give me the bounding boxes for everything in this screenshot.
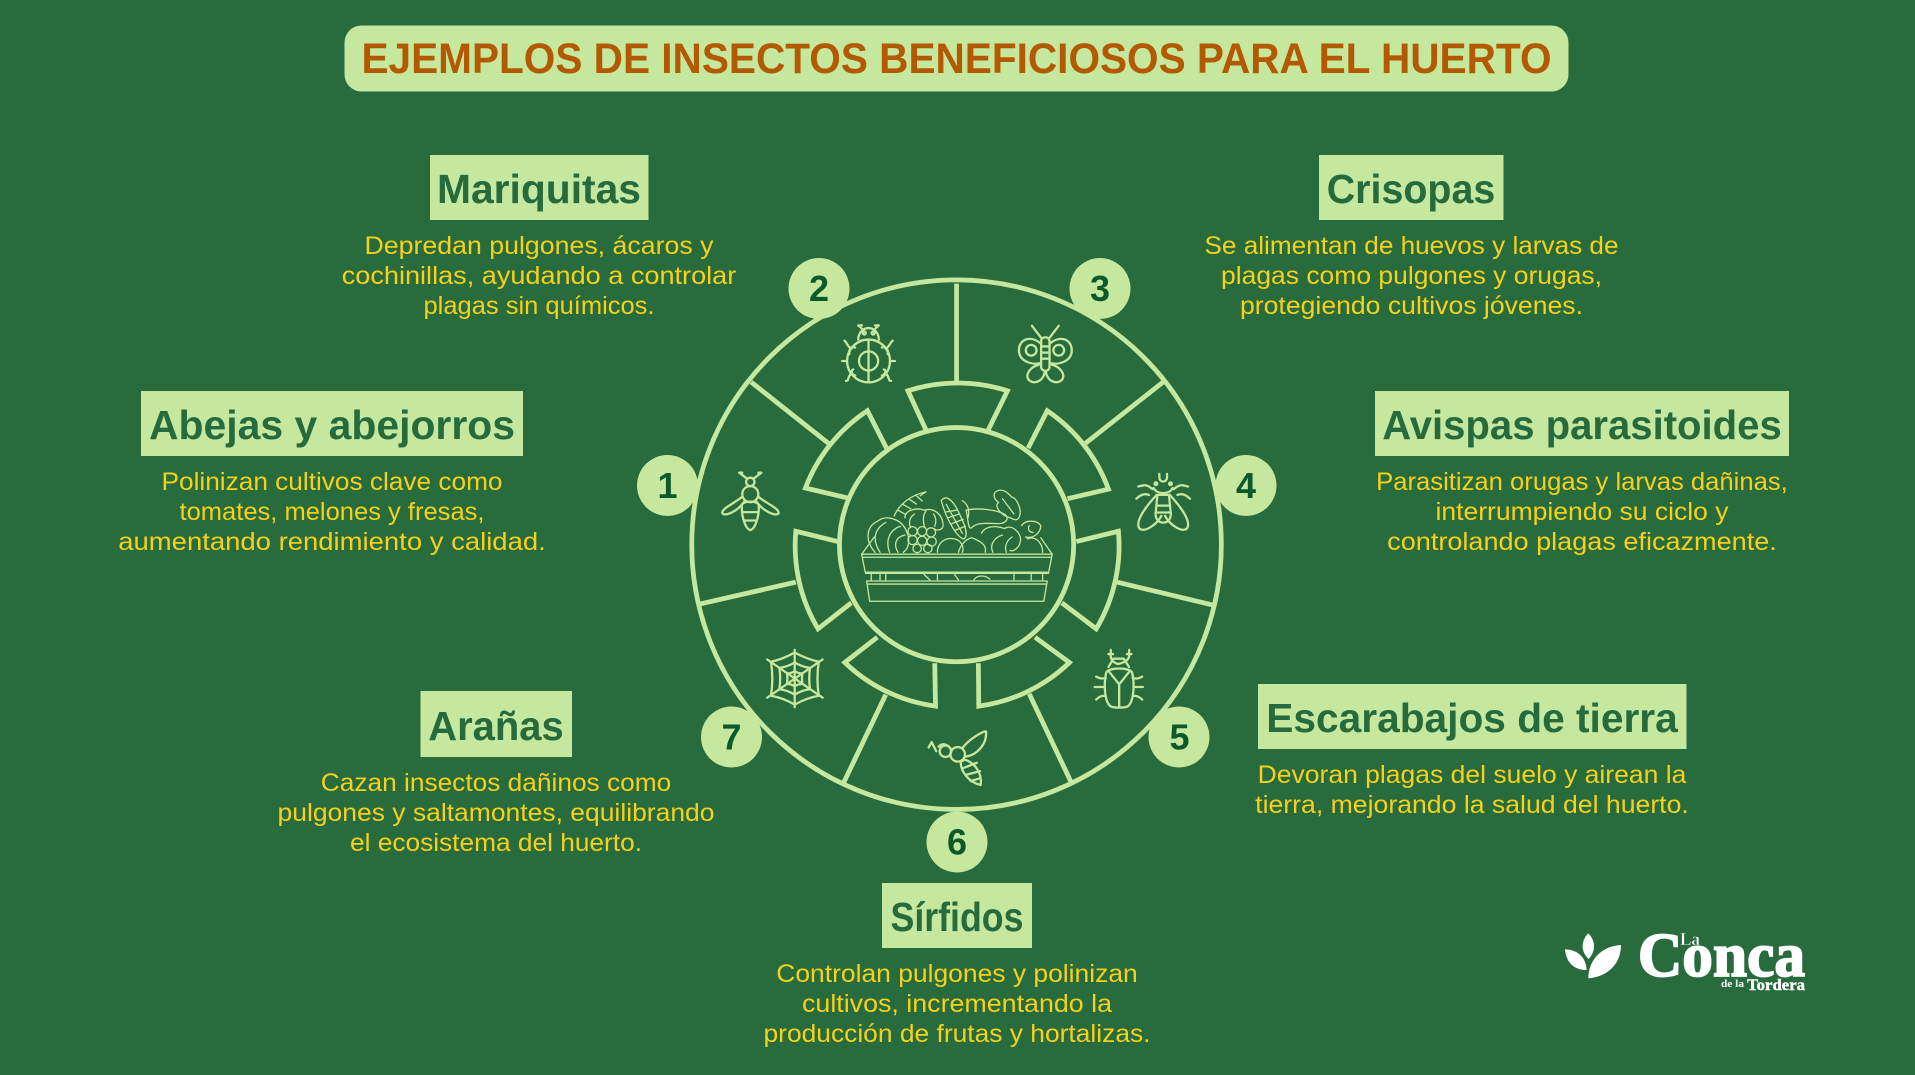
text: Mariquitas description: Depredan pulgones, ácaros y xyxy=(364,232,714,260)
icon: three white leaves xyxy=(1565,933,1621,978)
chart: circular wheel diagram xyxy=(692,280,1221,809)
logo: La Conca de la Tordera: de la xyxy=(1721,979,1744,990)
text: Sírfidos description: Controlan pulgones y polinizan xyxy=(776,960,1138,988)
badge: number 6 xyxy=(926,812,988,872)
badge: number 5: 5 xyxy=(1169,716,1190,758)
text: Arañas description: Cazan insectos dañinos como xyxy=(321,769,671,797)
badge: number 5 xyxy=(1148,706,1210,768)
icon: butterfly (3) xyxy=(1019,326,1072,382)
text: Sírfidos description: producción de frutas y hortalizas. xyxy=(764,1020,1150,1048)
text: Arañas description: el ecosistema del huerto. xyxy=(350,829,642,857)
heading: Arañas: Arañas xyxy=(428,703,564,749)
text: Crisopas description: Se alimentan de huevos y larvas de xyxy=(1204,232,1618,260)
heading: Mariquitas xyxy=(430,155,648,220)
text: Crisopas description: protegiendo cultivos jóvenes. xyxy=(1240,292,1583,320)
heading: Sírfidos: Sírfidos xyxy=(890,894,1024,940)
panel: Abejas y abejorros xyxy=(118,391,546,556)
icon: hoverfly (6) xyxy=(929,731,986,785)
text: Mariquitas description: cochinillas, ayudando a controlar xyxy=(342,262,736,290)
title: EJEMPLOS DE INSECTOS BENEFICIOSOS PARA EL HUERTO xyxy=(362,36,1552,83)
badge: number 7 xyxy=(701,706,762,768)
heading: Mariquitas: Mariquitas xyxy=(437,166,641,212)
logo: La Conca de la Tordera: Tordera xyxy=(1747,977,1805,994)
badge: number 2 xyxy=(788,258,850,319)
heading: Crisopas xyxy=(1319,155,1504,220)
text: Avispas description xyxy=(1376,468,1788,556)
panel: Mariquitas xyxy=(342,155,736,320)
heading: Escarabajos de tierra xyxy=(1258,684,1686,749)
logo: La Conca de la Tordera: Conca xyxy=(1638,922,1805,990)
icon: ground beetle (5) xyxy=(1095,650,1143,708)
text: Abejas description: aumentando rendimiento y calidad. xyxy=(118,528,546,556)
icon: parasitoid wasp (4) xyxy=(1136,474,1190,530)
panel: Arañas xyxy=(278,691,714,857)
heading: Abejas y abejorros xyxy=(141,391,523,456)
text: Avispas description: interrumpiendo su ciclo y xyxy=(1436,498,1729,526)
text: Abejas description xyxy=(118,468,546,556)
text: Arañas description: pulgones y saltamontes, equilibrando xyxy=(278,799,714,827)
text: Escarabajos description xyxy=(1255,761,1689,819)
text: Abejas description: tomates, melones y fresas, xyxy=(180,498,484,526)
badge: number 6: 6 xyxy=(947,822,967,862)
icon: ladybug (2) xyxy=(842,325,895,382)
logo: La Conca de la Tordera xyxy=(1565,922,1805,994)
text: Escarabajos description: Devoran plagas del suelo y airean la xyxy=(1258,761,1686,789)
heading: Escarabajos de tierra: Escarabajos de tierra xyxy=(1266,695,1679,741)
text: Sírfidos description xyxy=(764,960,1150,1048)
icon: spider web (7) xyxy=(767,650,823,707)
text: Sírfidos description: cultivos, incrementando la xyxy=(802,990,1112,1018)
badge: number 7: 7 xyxy=(721,716,742,758)
text: Crisopas description xyxy=(1204,232,1618,320)
text: Mariquitas description xyxy=(342,232,736,320)
badge: number 2: 2 xyxy=(809,268,829,309)
heading: Arañas xyxy=(420,691,572,757)
panel: Crisopas xyxy=(1204,155,1618,320)
heading: Sírfidos xyxy=(882,883,1032,948)
badge: number 1 xyxy=(637,455,698,516)
text: Arañas description xyxy=(278,769,714,857)
badge: number 4: 4 xyxy=(1236,465,1256,506)
heading: Crisopas: Crisopas xyxy=(1327,166,1495,212)
heading: Avispas parasitoides xyxy=(1375,391,1789,456)
panel: Escarabajos de tierra xyxy=(1255,684,1689,819)
text: Mariquitas description: plagas sin químicos. xyxy=(424,292,654,320)
heading: Abejas y abejorros: Abejas y abejorros xyxy=(149,402,515,448)
text: Crisopas description: plagas como pulgones y orugas, xyxy=(1221,262,1602,290)
badge: number 4 xyxy=(1216,455,1276,516)
panel: Sírfidos xyxy=(764,883,1150,1048)
icon: vegetable crate xyxy=(862,490,1052,601)
text: Abejas description: Polinizan cultivos clave como xyxy=(162,468,502,496)
text: Avispas description: Parasitizan orugas y larvas dañinas, xyxy=(1376,468,1788,496)
title xyxy=(344,26,1568,92)
badge: number 1: 1 xyxy=(657,465,678,506)
heading: Avispas parasitoides: Avispas parasitoides xyxy=(1382,402,1782,448)
icon: bee (1) xyxy=(722,473,779,530)
badge: number 3: 3 xyxy=(1090,268,1110,309)
text: Escarabajos description: tierra, mejorando la salud del huerto. xyxy=(1255,791,1689,819)
logo: La Conca de la Tordera: La xyxy=(1680,929,1700,949)
text: Avispas description: controlando plagas eficazmente. xyxy=(1387,528,1777,556)
panel: Avispas parasitoides xyxy=(1375,391,1789,556)
badge: number 3 xyxy=(1070,258,1130,319)
